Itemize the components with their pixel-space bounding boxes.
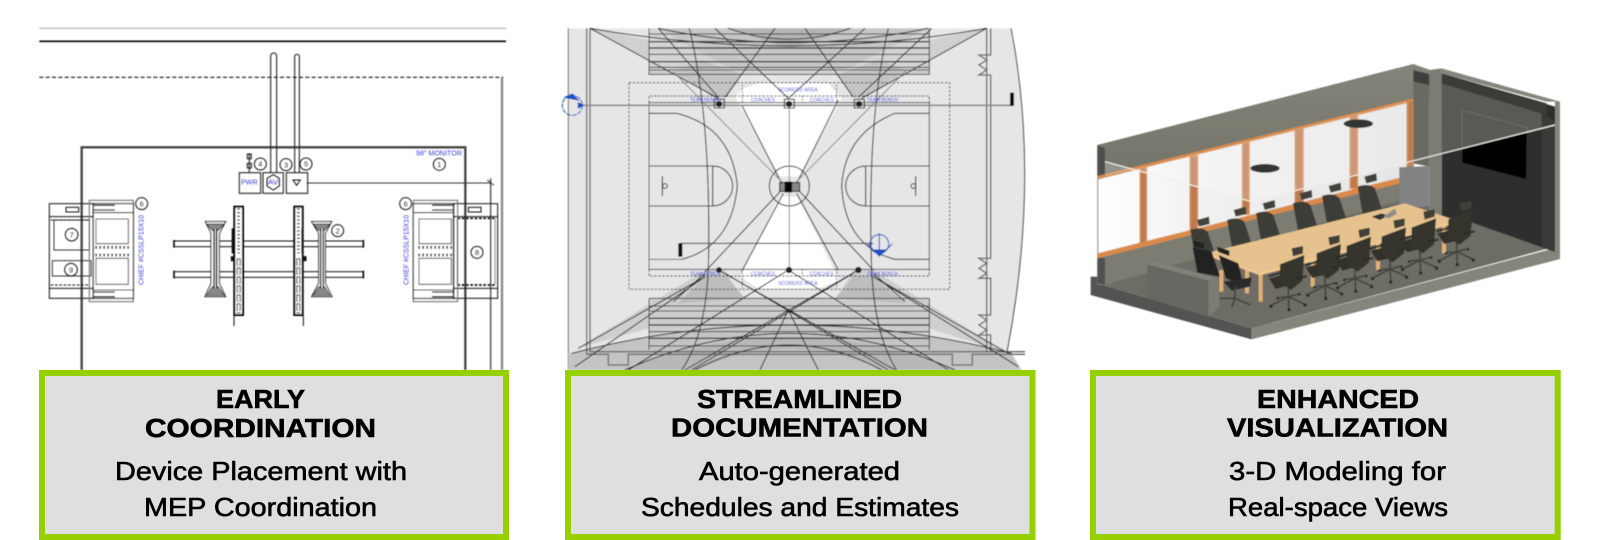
callout numbers: 8 (475, 248, 479, 257)
panel: enhanced visualization (1091, 64, 1560, 537)
rear chairs (1190, 173, 1390, 260)
court labels: TEAM BENCH (690, 98, 721, 104)
court (629, 83, 950, 289)
heading: ENHANCED (1257, 384, 1419, 414)
callout numbers: 1 (437, 160, 441, 169)
3-D conference room model (1091, 64, 1560, 339)
cabinet (1399, 166, 1429, 207)
caption box: early coordination (42, 373, 506, 537)
section markers (562, 94, 892, 256)
court labels: TEAM BENCH (867, 272, 898, 278)
monitor outline (82, 147, 465, 370)
panel: early coordination (39, 28, 506, 537)
device boxes (239, 153, 308, 193)
drawing: gymnasium plan with coverage (562, 28, 1025, 370)
ceiling discs (1250, 119, 1373, 173)
panel: streamlined documentation (562, 28, 1032, 537)
subtext line 2: Schedules and Estimates (641, 492, 959, 522)
callout numbers: 5 (304, 160, 308, 169)
front chairs (1193, 201, 1475, 311)
heading line 2: VISUALIZATION (1227, 412, 1448, 442)
caption box: streamlined documentation (568, 373, 1032, 537)
heading line 2: COORDINATION (145, 413, 376, 443)
subtext: Device Placement with (115, 456, 407, 486)
label: left mount model: CHIEF #CSSLP15X10 (136, 215, 145, 285)
heading: STREAMLINED (697, 384, 902, 414)
coverage cones (568, 28, 1022, 370)
subtext line 2: Real-space Views (1228, 492, 1448, 522)
subtext: Auto-generated (699, 456, 900, 486)
projection sight lines (572, 28, 1018, 370)
wall screen (1462, 132, 1527, 179)
floor slab (1091, 197, 1560, 339)
subtext line 2: MEP Coordination (144, 492, 377, 522)
court labels: TEAM BENCH (690, 272, 721, 278)
half wall (1147, 262, 1219, 317)
conduits (271, 53, 299, 173)
glass partition line (1105, 125, 1555, 202)
court labels: COACHES (751, 98, 775, 104)
court labels (690, 87, 898, 287)
central wall mount (174, 207, 363, 326)
device boxes: PWR (241, 178, 258, 187)
court labels: COACHES (751, 272, 775, 278)
callout numbers: 3 (284, 160, 288, 169)
left wall box stack (49, 200, 133, 302)
callout numbers: 4 (258, 160, 262, 169)
callout numbers: 2 (336, 226, 340, 235)
conference table (1208, 203, 1455, 302)
callout numbers (65, 158, 483, 276)
callout numbers: 6 (404, 199, 408, 208)
subtext: 3-D Modeling for (1229, 456, 1446, 486)
bleachers (649, 28, 929, 350)
projector symbols (714, 99, 864, 273)
court labels: TEAM BENCH (867, 98, 898, 104)
white clear zone (735, 83, 842, 177)
label: 98 inch monitor: 98" MONITOR (416, 149, 462, 158)
device boxes: AV (268, 178, 279, 187)
callout numbers: 7 (70, 230, 74, 239)
court labels: SCORERS' AREA (778, 281, 818, 287)
right wall box stack (413, 200, 498, 302)
heading: EARLY (216, 384, 305, 414)
callout numbers: 9 (69, 265, 73, 274)
label: right mount model: CHIEF #CSSLP15X10 (401, 215, 410, 285)
heading line 2: DOCUMENTATION (671, 412, 928, 442)
caption box: enhanced visualization (1093, 373, 1558, 537)
end wall (1429, 68, 1560, 259)
court labels: COACHES (810, 98, 834, 104)
section lines (582, 93, 1014, 257)
window wall (1097, 64, 1430, 285)
callout numbers: 6 (140, 199, 144, 208)
building walls (587, 28, 1025, 365)
court labels: SCORERS' AREA (778, 87, 818, 93)
drawing: AV device placement elevation (39, 28, 506, 370)
court labels: COACHES (810, 272, 834, 278)
